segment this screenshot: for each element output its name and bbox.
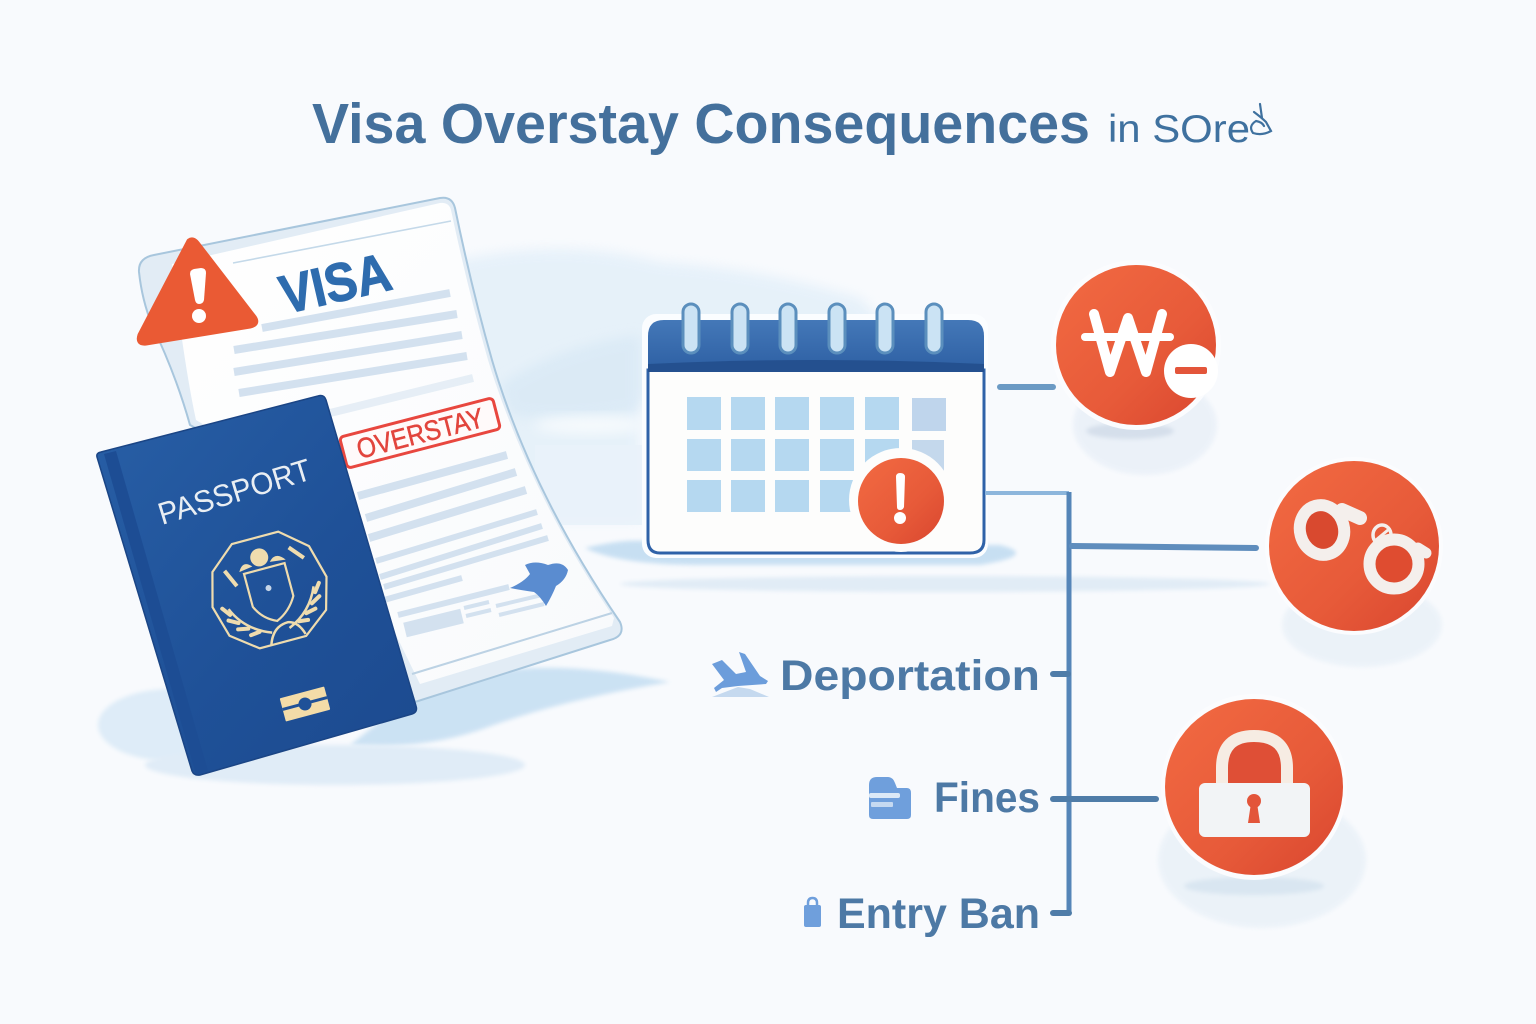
fines label [869,774,1040,822]
calendar body [648,370,984,553]
passport [97,396,416,775]
icon: won fine badge [1051,260,1221,430]
icon: small lock [804,898,821,927]
visa document [139,198,622,702]
entry ban label: Entry Ban [837,890,1040,938]
fines label: Fines [934,774,1040,822]
icon: folder [869,777,911,819]
document sheet [139,198,622,702]
document header rule [233,221,451,263]
icon: handcuffs badge [1265,457,1443,635]
passport emblem [198,523,340,657]
calendar rings [683,304,942,353]
title: in SOre [1108,108,1250,151]
passport chip [280,686,330,722]
icon: departing plane [712,652,769,697]
calendar [642,304,988,558]
title: Visa Overstay Consequences [312,92,1090,156]
VISA heading: VISA [274,242,397,326]
document text lines [234,293,612,674]
calendar day cells [687,397,946,512]
icon: padlock badge [1161,694,1347,880]
deportation label: Deportation [780,652,1040,700]
connector lines [985,387,1256,914]
calendar header [648,320,984,372]
calendar alert badge [849,448,953,552]
icon: blue bird [510,562,568,606]
background: watercolor clouds [98,249,1442,928]
icon: warning triangle [139,240,256,343]
passport heading: PASSPORT [154,452,315,532]
overstay stamp: OVERSTAY [353,402,487,465]
